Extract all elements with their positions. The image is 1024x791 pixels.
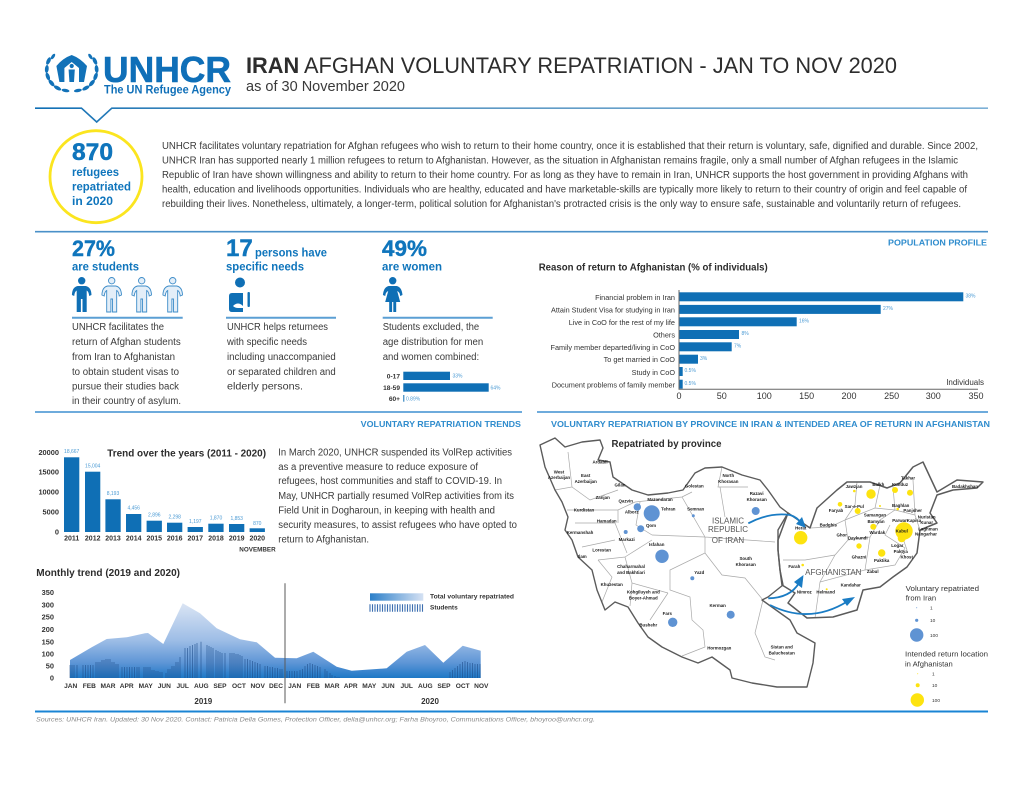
callout: 870 refugees repatriated: in 2020 (72, 194, 113, 208)
subtitle: as of 30 November 2020 (246, 79, 405, 95)
year labels: 2017 (188, 536, 203, 542)
year labels: 2012 (85, 536, 101, 542)
month labels: JUN (158, 683, 171, 690)
students text: pursue their studies back (72, 382, 179, 392)
month labels: OCT (456, 683, 470, 690)
province labels: Afghanistan: Samangan (864, 512, 886, 518)
women text: age distribution for men (383, 337, 483, 348)
province labels: Afghanistan: Khost (900, 554, 913, 560)
value labels: 2,896 (148, 512, 161, 518)
value labels: 4,456 (127, 506, 140, 512)
legend: Students (430, 604, 458, 612)
month labels: JAN (288, 683, 302, 690)
area chart: monthly trend: 150 (42, 637, 54, 646)
province labels: Iran: Sistan and (771, 644, 793, 650)
province labels: Iran: Semnan (687, 506, 705, 512)
legend: intended return location: in Afghanistan (905, 660, 953, 669)
legend: intended return location: 100 (932, 698, 940, 704)
women text: and women combined: (383, 352, 479, 363)
bars (64, 457, 265, 532)
area chart: monthly trend: 100 (42, 650, 54, 659)
province labels: Iran: Lorestan (592, 548, 611, 552)
panel: specific needs stat (226, 235, 336, 392)
country label: Iran: REPUBLIC (708, 525, 748, 534)
icon: four people, one in four a student (72, 277, 182, 312)
tagline: The UN Refugee Agency (104, 84, 232, 96)
province labels: Iran: North (722, 473, 734, 478)
value labels: 3% (700, 356, 708, 362)
value labels: 38% (966, 294, 976, 300)
value labels (684, 294, 976, 387)
province labels: Iran: and Bakhtiari (617, 570, 645, 575)
province labels: Iran: Qazvin (618, 498, 633, 504)
month labels: MAR (100, 683, 116, 690)
value labels: 8,193 (107, 491, 119, 497)
panel: students stat: are students (72, 260, 139, 274)
area chart: monthly trend: 2019 (194, 697, 213, 706)
panel: women stat: are women (382, 260, 442, 274)
icon: woman (383, 277, 402, 312)
month labels: APR (344, 683, 358, 690)
horizontal bars (679, 292, 963, 389)
category labels: To get married in CoO (604, 355, 675, 364)
students stripes (70, 642, 480, 678)
heading: voluntary repatriation trends: VOLUNTARY REPATRIATION TRENDS (361, 419, 521, 429)
value labels: 0.5% (684, 368, 696, 374)
category labels (550, 293, 676, 390)
bar chart: age distribution: 33% (452, 374, 463, 380)
chart title: Reason of return to Afghanistan (% of individuals) (539, 262, 768, 274)
province labels: Afghanistan: Parwan (892, 518, 908, 523)
heading: population profile: POPULATION PROFILE (888, 238, 987, 248)
country label: Afghanistan: AFGHANISTAN (805, 568, 862, 577)
value labels: 16% (799, 318, 810, 324)
intro paragraph: UNHCR facilitates voluntary repatriation for Afghan refugees who wish to return to their home country, once it is established that their return is voluntary, safe, dignified and durable. Since 2002, (162, 141, 978, 152)
callout: 870 refugees repatriated: refugees (72, 165, 119, 179)
text block: VolRep suspension: as a preventive measure to reduce exposure of (278, 462, 478, 473)
axis labels: 200 (841, 391, 857, 401)
month labels: NOV (474, 683, 489, 690)
title (246, 53, 897, 95)
province labels: Iran: Tehran (661, 506, 676, 512)
province labels: Iran: Kermanshah (567, 530, 594, 535)
map: Iran and Afghanistan (540, 438, 983, 687)
value labels: 7% (734, 344, 742, 350)
icon: UNHCR emblem (45, 53, 99, 93)
intro paragraph: health, education and livelihoods opportunities. Individuals who are healthy, educated and have marketable-skills are typically more likely to return to their country of origin and feel capable of (162, 184, 967, 196)
axis labels: 150 (799, 391, 814, 401)
province labels: Afghanistan: Takhar (901, 476, 915, 480)
province labels: Iran: East (581, 473, 591, 478)
category labels: Attain Student Visa for studying in Iran (551, 306, 675, 314)
value labels: 27% (883, 306, 894, 312)
intro paragraph (162, 141, 978, 210)
area chart: monthly trend: 2020 (421, 697, 439, 706)
students text: return of Afghan students (72, 337, 181, 348)
Iran province borders (555, 452, 775, 660)
province labels: Iran: Khorasan (747, 497, 767, 502)
axis labels: 100 (757, 391, 772, 401)
bar chart: age distribution: 64% (490, 386, 501, 392)
axis labels: 350 (968, 391, 984, 401)
province labels: Iran: Isfahan (649, 542, 665, 547)
panel: reason of return chart: Individuals (946, 378, 984, 387)
year labels: 2014 (126, 536, 142, 542)
bar chart: trend over the years: 20000 (38, 448, 59, 457)
area chart: monthly trend: 200 (42, 625, 54, 634)
year labels: 2018 (208, 536, 224, 542)
province labels: Afghanistan: Kunar (920, 520, 933, 525)
value labels: 18,667 (64, 449, 80, 455)
bar chart: age distribution: 18-59 (383, 385, 400, 392)
province labels: Afghanistan: Nuristan (918, 514, 936, 520)
province labels: Afghanistan: Badakhshan (952, 484, 978, 489)
legend: intended return location: 10 (932, 683, 938, 689)
bar chart: age distribution: 60+ (389, 396, 400, 403)
year labels (64, 536, 276, 554)
month labels: JUL (176, 683, 189, 690)
Afghanistan outline (778, 462, 983, 618)
category labels: Study in CoO (632, 368, 675, 377)
panel: students stat: 27% (72, 236, 115, 261)
panel: students stat (72, 236, 183, 407)
callout: 870 refugees repatriated: repatriated (72, 180, 131, 194)
province labels: Iran: Gilan (615, 482, 626, 488)
area: total voluntary repatriated (70, 603, 481, 678)
legend: voluntary repatriated from Iran: 100 (930, 633, 938, 639)
value labels: 15,004 (85, 464, 101, 470)
legend: voluntary repatriated from Iran (906, 584, 979, 642)
specific needs text: or separated children and (227, 367, 336, 378)
province labels: Afghanistan: Jawzjan (846, 484, 863, 489)
wordmark: UNHCR (103, 49, 231, 90)
axis labels (676, 391, 984, 401)
province labels: Afghanistan: Kandahar (841, 582, 861, 588)
province labels: Afghanistan: Panjsher (903, 508, 922, 513)
header rule with pointer (35, 108, 988, 122)
year labels: NOVEMBER (239, 546, 276, 554)
text block: VolRep suspension: Field Unit in Dogharoun, in keeping with health and (278, 506, 495, 516)
bubbles: repatriated from Iran provinces (624, 503, 760, 627)
map title: Repatriated by province (612, 439, 722, 450)
province labels: Iran: Kurdistan (574, 508, 595, 512)
province labels: Iran: Azerbaijan (548, 475, 570, 480)
divider 2019 / 2020 (284, 583, 286, 703)
area chart: monthly trend (36, 567, 514, 706)
year labels: 2015 (147, 536, 162, 542)
area chart: monthly trend: 50 (46, 662, 54, 671)
year labels: 2019 (229, 536, 245, 542)
specific needs text: including unaccompanied (227, 352, 336, 363)
category labels: Family member departed/living in CoO (550, 343, 675, 352)
country label: Iran (708, 516, 748, 545)
value labels (64, 449, 262, 527)
value labels: 2,298 (168, 514, 181, 520)
province labels: Iran: Baluchestan (769, 650, 795, 656)
panel: specific needs stat: 17 (226, 235, 253, 262)
month labels: JUN (381, 683, 395, 690)
month labels: DEC (269, 683, 283, 690)
students text: to obtain student visas to (72, 367, 179, 378)
province labels: Afghanistan: Daykundi (848, 536, 868, 540)
Iran outline (540, 438, 815, 687)
callout: 870 refugees repatriated: 870 (72, 139, 113, 166)
axis labels: 250 (884, 391, 899, 401)
students text: from Iran to Afghanistan (72, 352, 175, 363)
area chart: monthly trend: 350 (42, 588, 54, 597)
province labels: Iran: Kerman (710, 603, 726, 608)
panel: specific needs stat: specific needs (226, 260, 304, 274)
legend: intended return location (905, 650, 988, 707)
area chart: monthly trend: 250 (42, 613, 54, 622)
province labels: Iran (548, 460, 795, 656)
intro paragraph: UNHCR Iran has supported nearly 1 million refugees to return to Afghanistan. However, as the situation in Afghanistan remains fragile, only a small number of Afghan refugees in the Islamic (162, 156, 958, 166)
province labels: Iran: Zanjan (596, 495, 610, 500)
bar chart: trend over the years (38, 448, 276, 554)
legend: voluntary repatriated from Iran: 1 (930, 606, 933, 612)
area chart: monthly trend: 0 (50, 674, 54, 683)
legend: Total voluntary repatriated (430, 594, 514, 600)
legend (370, 593, 514, 612)
province labels: Afghanistan: Paktya (894, 549, 908, 554)
year labels: 2013 (105, 536, 121, 542)
bar chart: trend over the years: 5000 (43, 508, 59, 516)
month labels: MAY (139, 683, 153, 690)
month labels: JAN (64, 683, 78, 690)
province labels: Afghanistan: Nimroz (797, 590, 813, 594)
province labels: Iran: Razavi (750, 491, 764, 496)
intro paragraph: Republic of Iran have shown willingness and ability to return to their home country. For as long as they have to remain in Iran, UNHCR supports the host government in providing Afghans with (162, 170, 968, 181)
panel: reason of return chart (539, 262, 984, 401)
province labels: Afghanistan: Balkh (872, 482, 885, 487)
month labels: SEP (213, 683, 227, 690)
province labels: Afghanistan: Sar-e-Pul (845, 504, 864, 509)
category labels: Live in CoO for the rest of my life (569, 318, 675, 327)
specific needs text (226, 322, 336, 392)
province labels: Afghanistan (788, 476, 978, 594)
month labels: APR (120, 683, 134, 690)
axis labels: 0 (676, 391, 682, 401)
text block: VolRep suspension: In March 2020, UNHCR suspended its VolRep activities (278, 448, 512, 458)
legend: voluntary repatriated from Iran: 10 (930, 618, 936, 624)
bar chart: age distribution: 0.89% (406, 396, 421, 402)
province labels: Afghanistan: Bamyan (867, 519, 885, 524)
province labels: Iran: Khorasan (736, 562, 756, 567)
province labels: Iran: Mazandaran (647, 497, 673, 502)
province labels: Afghanistan: Wardak (869, 530, 886, 535)
province labels: Iran: Khuzestan (601, 582, 623, 587)
province labels: Iran: Golestan (685, 484, 704, 488)
province labels: Afghanistan: Farah (788, 564, 801, 569)
month labels: MAR (324, 683, 340, 690)
province labels: Afghanistan: Nangarhar (915, 532, 937, 536)
women text: Students excluded, the (383, 322, 479, 333)
month labels: SEP (437, 683, 451, 690)
value labels: 1,197 (189, 519, 202, 525)
value labels: 0.5% (684, 381, 696, 387)
province labels: Afghanistan: Ghazni (852, 554, 866, 560)
province labels: Iran: West (554, 470, 565, 474)
province labels: Iran: Khorasan (718, 479, 739, 484)
province labels: Iran: Fars (663, 611, 672, 616)
legend: intended return location: 1 (932, 672, 935, 678)
province labels: Afghanistan: Kunduz (892, 482, 909, 487)
province labels: Afghanistan: Logar (891, 543, 904, 548)
province labels: Afghanistan: Herat (795, 526, 807, 530)
bar chart: trend over the years: 15000 (38, 468, 59, 476)
province labels: Iran: Qom (646, 523, 656, 528)
students text (72, 322, 181, 407)
value labels: 1,853 (230, 516, 243, 522)
year labels: 2020 (250, 536, 265, 542)
area chart: monthly trend: 300 (42, 600, 54, 609)
province labels: Afghanistan: Kapisa (907, 518, 922, 523)
intro paragraph: rebuilding their lives. Nonetheless, ultimately, a longer-term, political solution for Afghanistan's protracted crisis is the only way to ensure safe, sustainable and voluntarily return of refugees. (162, 199, 961, 210)
province labels: Iran: Hamadan (597, 518, 617, 524)
legend: intended return location: Intended return location (905, 650, 988, 659)
text block: VolRep suspension (278, 448, 517, 546)
bar chart: trend over the years: 10000 (38, 488, 59, 496)
province labels: Afghanistan: Helmand (816, 590, 835, 594)
category labels: Others (653, 330, 675, 340)
province labels: Afghanistan: Kabul (896, 528, 908, 534)
year labels: 2011 (64, 536, 79, 542)
province labels: Iran: Markazi (619, 537, 635, 542)
month labels: NOV (251, 683, 265, 690)
bar chart: age distribution: 0-17 (387, 374, 400, 380)
province labels: Iran: Hormozgan (707, 646, 732, 650)
specific needs text: elderly persons. (227, 382, 303, 392)
month labels: FEB (83, 683, 96, 690)
month labels: OCT (232, 683, 246, 690)
province labels: Iran: South (739, 556, 752, 561)
province labels: Afghanistan: Faryab (829, 508, 844, 513)
legend: voluntary repatriated from Iran: from Iran (906, 594, 936, 603)
month labels: AUG (418, 683, 433, 690)
category labels: Financial problem in Iran (595, 293, 675, 302)
province labels: Iran: Ardabil (592, 460, 608, 464)
bar chart: age distribution (383, 372, 501, 403)
province labels: Iran: Bushehr (639, 622, 657, 628)
province labels: Afghanistan: Badghis (820, 522, 838, 528)
chart title: Trend over the years (2011 - 2020) (107, 448, 266, 460)
arrows: return flows (748, 514, 855, 614)
province labels: Iran: Yazd (694, 570, 705, 575)
month labels (64, 683, 489, 690)
month labels: FEB (307, 683, 320, 690)
legend: voluntary repatriated from Iran: Voluntary repatriated (906, 584, 979, 593)
bar chart: trend over the years: 0 (55, 528, 59, 536)
year labels: 2016 (167, 536, 183, 542)
value labels: 8% (742, 331, 749, 337)
country label: Iran: OF IRAN (712, 536, 744, 545)
text block: VolRep suspension: May, UNHCR partially resumed VolRep activities from its (278, 491, 514, 502)
women text (383, 322, 483, 363)
specific needs text: with specific needs (226, 337, 307, 348)
chart title: Monthly trend (2019 and 2020) (36, 567, 180, 579)
month labels: MAY (362, 683, 377, 690)
text block: VolRep suspension: refugees, host communities and staff to COVID-19. In (278, 476, 502, 487)
students text: in their country of asylum. (72, 396, 181, 407)
bubbles: intended return in Afghanistan (794, 487, 913, 590)
month labels: JUL (400, 683, 413, 690)
category labels: Document problems of family member (552, 380, 676, 390)
students text: UNHCR facilitates the (72, 322, 164, 333)
province labels: Iran: Boyer-Ahmad (629, 596, 658, 600)
province labels: Iran: Alborz (625, 510, 639, 514)
province labels: Iran: Chaharmahal (617, 564, 645, 569)
country label: Iran: ISLAMIC (712, 516, 744, 526)
province labels: Afghanistan: Laghman (918, 526, 938, 532)
title: IRAN AFGHAN VOLUNTARY REPATRIATION - JAN TO NOV 2020 (246, 53, 897, 78)
sources footnote: Sources: UNHCR Iran. Updated: 30 Nov 2020. Contact: Patricia Della Gomes, Protection Officer, della@unhcr.org; Farha Bhoyroo, Communications Officer, bhoyroo@unhcr.org. (36, 717, 595, 724)
text block: VolRep suspension: return to Afghanistan. (278, 535, 369, 546)
month labels: AUG (194, 683, 209, 690)
panel: women stat (382, 236, 501, 403)
panel: women stat: 49% (382, 236, 427, 261)
province labels: Iran: Azerbaijan (575, 479, 597, 484)
value labels: 870 (253, 521, 262, 527)
icon: person with specific needs (229, 278, 250, 312)
axis labels: 300 (926, 391, 941, 401)
heading: map section: VOLUNTARY REPATRIATION BY PROVINCE IN IRAN & INTENDED AREA OF RETURN IN AFGHANISTAN (551, 419, 990, 429)
panel: specific needs stat: persons have (255, 246, 327, 260)
province labels: Afghanistan: Paktika (874, 558, 890, 563)
text block: VolRep suspension: security measures, to assist refugees who have opted to (278, 520, 517, 531)
province labels: Afghanistan: Ghor (836, 532, 847, 538)
province labels: Afghanistan: Zabul (867, 569, 879, 574)
province labels: Afghanistan: Baghlan (892, 503, 910, 508)
Afghanistan province borders (783, 480, 920, 618)
callout: 870 refugees repatriated (50, 131, 142, 223)
province labels: Iran: Kohgiluyeh and (627, 590, 660, 594)
province labels: Iran: Ilam (578, 554, 587, 559)
axis labels: 50 (717, 391, 727, 401)
specific needs text: UNHCR helps returnees (227, 322, 328, 333)
UNHCR logo (45, 49, 232, 96)
value labels: 1,870 (210, 516, 222, 522)
